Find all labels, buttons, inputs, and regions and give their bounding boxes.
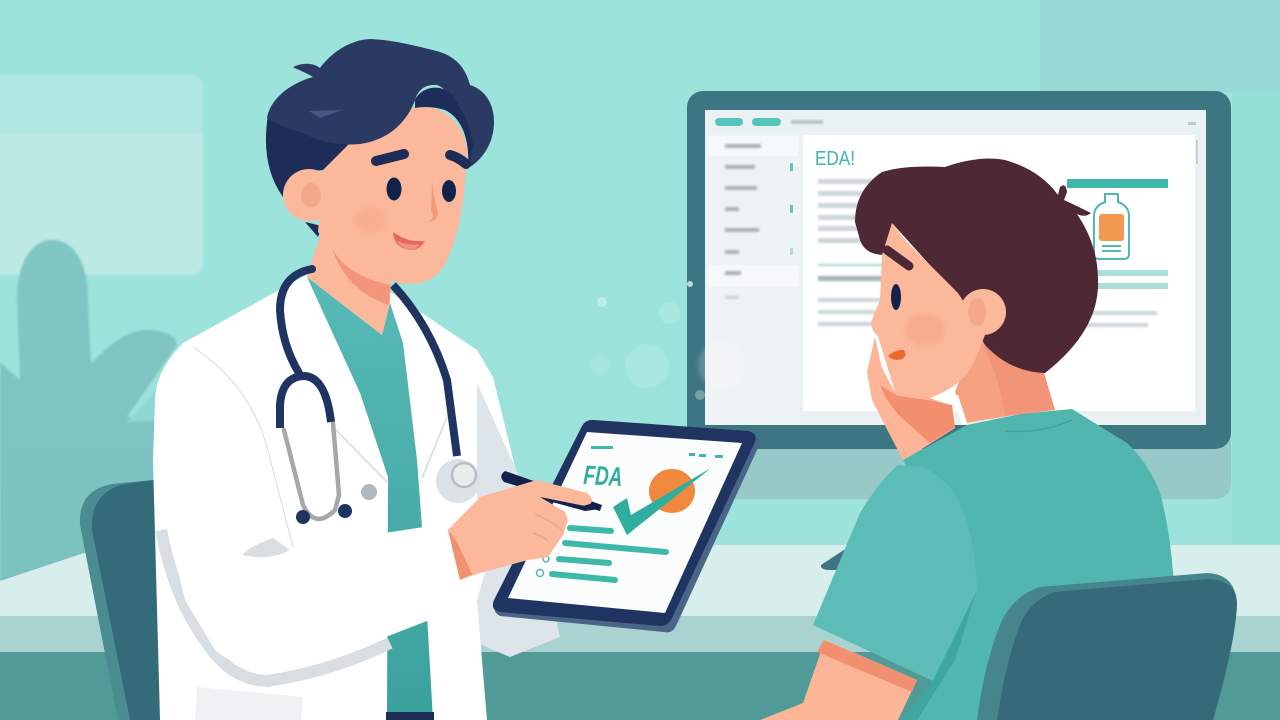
scrub shirt (307, 277, 433, 720)
coat sleeve (168, 523, 463, 667)
document heading: EDA! (815, 148, 855, 170)
monitor (687, 91, 1231, 499)
trouser hint (386, 712, 434, 720)
tablet body (493, 420, 756, 626)
monitor stand foot (821, 546, 850, 570)
shirt collar crease (1005, 420, 1072, 432)
mouth (888, 350, 906, 360)
tablet (493, 420, 760, 632)
neck shadow (332, 248, 390, 305)
shirt sleeve (813, 465, 977, 681)
tablet screen (508, 432, 742, 613)
stethoscope (280, 269, 457, 524)
checklist bullets (536, 556, 549, 576)
monitor chin (720, 440, 1231, 499)
patient arm (760, 640, 917, 720)
lab coat (153, 273, 515, 720)
eye (891, 284, 901, 310)
coat back side (477, 383, 560, 657)
label bar (1067, 179, 1168, 188)
orange circle (649, 469, 695, 513)
doctor hand with pen (448, 471, 602, 580)
front hair (267, 39, 494, 168)
stethoscope chest piece (436, 459, 480, 503)
coat fold (242, 538, 290, 557)
top tabs (715, 118, 1196, 126)
supporting hand (867, 337, 955, 460)
background plant silhouette (0, 240, 177, 600)
desk (0, 545, 1280, 720)
monitor bezel (687, 91, 1231, 449)
medicine bottle icon (1094, 194, 1129, 259)
coat lapel lines (193, 347, 447, 547)
arm shadow (161, 530, 390, 681)
eyes (386, 178, 456, 202)
pale teal bars (1060, 270, 1168, 289)
sleeve shadow (902, 590, 977, 720)
back of hair (855, 159, 1098, 373)
face (318, 107, 468, 284)
neck (955, 335, 1055, 423)
face (871, 223, 985, 400)
ear (960, 289, 1006, 335)
doctor (153, 39, 560, 720)
coat button (361, 484, 377, 500)
hair front sweep (892, 190, 1098, 373)
sparkles (580, 281, 746, 510)
sidebar (705, 135, 800, 425)
check mark (613, 468, 711, 535)
monitor screen (705, 110, 1206, 425)
back hair (266, 110, 350, 197)
patient shirt body (903, 409, 1200, 720)
coat pocket (195, 687, 303, 720)
wall panel (0, 75, 203, 275)
eyebrows (376, 154, 466, 164)
patient (760, 159, 1200, 720)
pen (501, 471, 602, 511)
eyebrow (887, 250, 909, 266)
screen gap beside neck (953, 395, 967, 425)
tablet edge (494, 424, 760, 632)
FDA label: FDA (583, 460, 623, 492)
checklist bars (552, 528, 666, 580)
screen header marks (591, 446, 723, 458)
document text lines (818, 179, 1157, 327)
coat side shading (477, 383, 530, 590)
document page (803, 135, 1195, 411)
patient chair (977, 573, 1237, 720)
left chair (80, 479, 165, 720)
nose (427, 180, 438, 222)
hand (448, 480, 592, 580)
neck (307, 230, 392, 335)
mouth (393, 232, 425, 250)
pen tip over hand (540, 497, 600, 511)
ear (283, 169, 335, 221)
